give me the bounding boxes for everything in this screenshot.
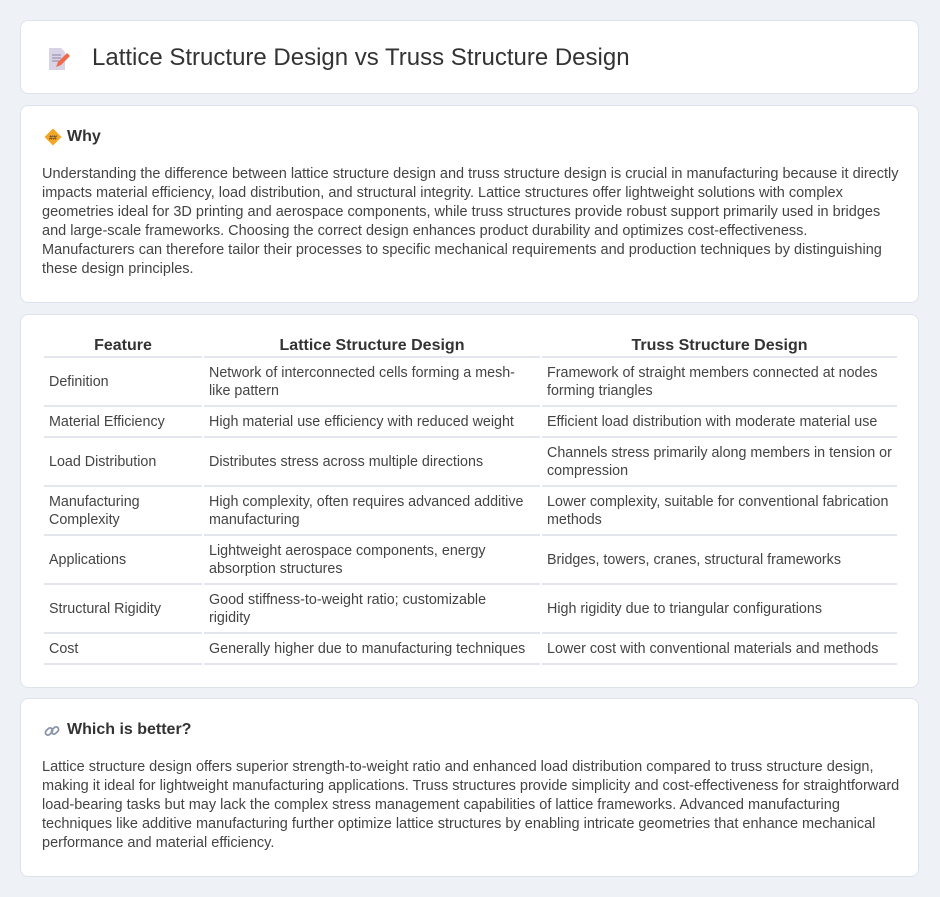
table: Distributes stress across multiple directions (209, 454, 483, 470)
table: Good stiffness-to-weight ratio; customizable (209, 592, 486, 608)
table: High complexity, often requires advanced additive manufacturing (209, 494, 523, 528)
panel: why (20, 105, 919, 303)
table: Cost (49, 641, 78, 657)
icon: link (44, 726, 60, 736)
table: Lattice Structure Design (280, 337, 464, 354)
table: Feature (94, 337, 152, 354)
table: Truss Structure Design (631, 337, 808, 354)
table: Applications (49, 552, 126, 568)
table: Manufacturing Complexity (49, 494, 140, 528)
table: High rigidity due to triangular configurations (547, 601, 822, 617)
table: Bridges, towers, cranes, structural frameworks (547, 552, 841, 568)
table: High material use efficiency with reduced weight (209, 414, 514, 430)
table: Structural Rigidity (49, 601, 161, 617)
table: Channels stress primarily along members in tension or compression (547, 445, 892, 479)
table: Definition (49, 374, 109, 390)
icon: diamond sign: ## (49, 135, 57, 142)
why text: Understanding the difference between lattice structure design and truss structure design is crucial in manufacturing because it directly impacts material efficiency, load distribution, and structural integrity. Lattice structures offer lightweight solutions with complex geometries ideal for 3D printing and aerospace components, while truss structures provide robust support primarily used in bridges and large-scale frameworks. Choosing the correct design enhances product durability and optimizes cost-effectiveness. Manufacturers can therefore tailor their processes to specific mechanical requirements and production techniques by distinguishing these design principles. (42, 166, 898, 277)
panel: comparison table (20, 314, 919, 688)
table: Lower complexity, suitable for conventional fabrication methods (547, 494, 888, 528)
header card (20, 20, 919, 94)
heading: why: Why (67, 128, 101, 145)
table: Efficient load distribution with moderate material use (547, 414, 877, 430)
table: Material Efficiency (49, 414, 165, 430)
table: Lower cost with conventional materials and methods (547, 641, 878, 657)
table: Network of interconnected cells forming a mesh-like pattern (209, 365, 515, 399)
title: Lattice Structure Design vs Truss Structure Design (92, 44, 630, 71)
table (44, 337, 897, 665)
panel: which is better (20, 698, 919, 877)
heading: which is better: Which is better? (67, 721, 191, 738)
table: Load Distribution (49, 454, 156, 470)
which text: Lattice structure design offers superior strength-to-weight ratio and enhanced load distribution compared to truss structure design, making it ideal for lightweight manufacturing applications. Truss structures provide simplicity and cost-effectiveness for straightforward load-bearing tasks but may lack the complex stress management capabilities of lattice frameworks. Advanced manufacturing techniques like additive manufacturing further optimize lattice structures by enabling intricate geometries that enhance mechanical performance and material efficiency. (42, 759, 899, 851)
table: Lightweight aerospace components, energy absorption structures (209, 543, 486, 577)
table: Generally higher due to manufacturing techniques (209, 641, 525, 657)
table: Framework of straight members connected at nodes forming triangles (547, 365, 878, 399)
icon: document pencil (49, 48, 70, 70)
icon: diamond sign (44, 128, 62, 146)
table: rigidity (209, 610, 250, 626)
